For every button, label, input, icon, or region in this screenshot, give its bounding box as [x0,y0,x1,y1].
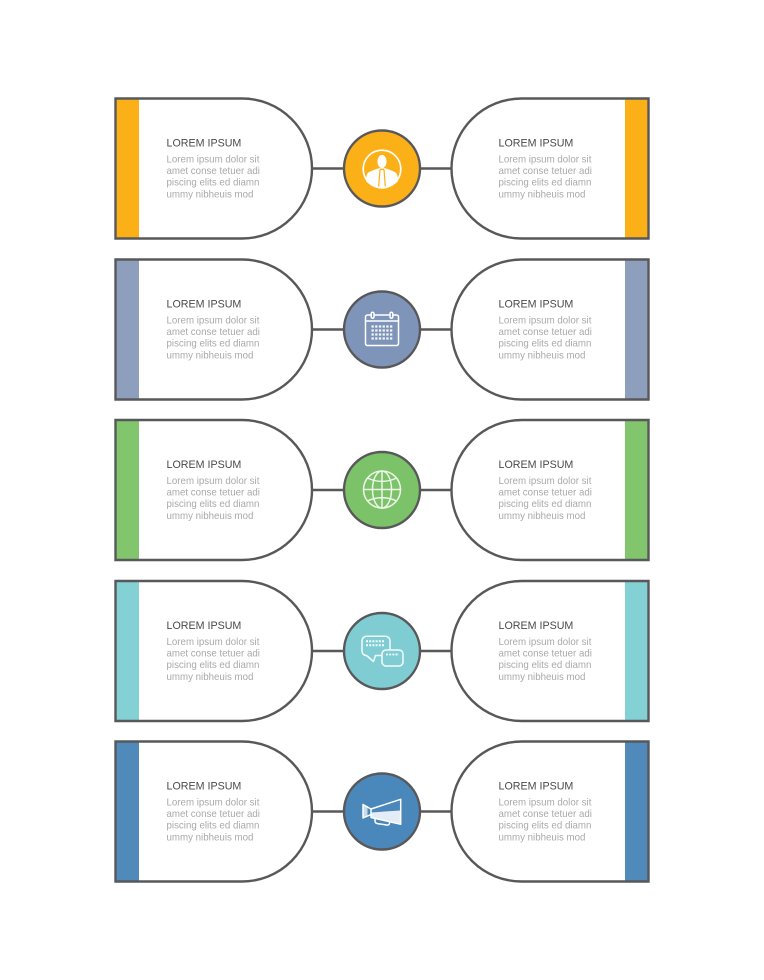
left text 4: LOREM IPSUM [166,620,241,632]
left panel 1 [116,98,312,238]
circle 4 [344,613,420,689]
left text 3: ummy nibheuis mod [166,511,253,522]
icon: megaphone [363,799,401,825]
row 4: teal [116,581,648,721]
right text 4: ummy nibheuis mod [498,672,585,683]
icon: calendar [366,312,398,346]
left text 3: LOREM IPSUM [166,459,241,471]
left text 5: Lorem ipsum dolor sit [166,797,260,808]
right text 2: Lorem ipsum dolor sit [498,315,592,326]
right text 3 [498,459,592,522]
right text 3: amet conse tetuer adi [498,488,592,498]
left text 4: Lorem ipsum dolor sit [166,637,260,648]
right text 4: Lorem ipsum dolor sit [498,637,592,648]
right text 3: piscing elits ed diamn [498,499,591,510]
right text 4 [498,620,592,683]
left text 1 [166,138,260,200]
right text 5: amet conse tetuer adi [498,809,592,820]
left text 3: amet conse tetuer adi [166,488,260,498]
left text 4: piscing elits ed diamn [166,660,259,671]
left text 1: amet conse tetuer adi [166,166,260,177]
right text 1: amet conse tetuer adi [498,166,592,177]
left text 2: amet conse tetuer adi [166,327,260,338]
right text 2: piscing elits ed diamn [498,339,591,350]
left text 3 [166,459,260,522]
left text 4: amet conse tetuer adi [166,648,260,660]
right text 2: amet conse tetuer adi [498,327,592,338]
right panel 4 [452,581,648,721]
connector 1 [312,167,452,170]
right text 4: amet conse tetuer adi [498,648,592,660]
left panel 3 [116,420,312,560]
row 1: orange [116,98,648,238]
right text 5: Lorem ipsum dolor sit [498,797,592,808]
right panel 5 [452,742,648,882]
left text 5: LOREM IPSUM [166,780,241,792]
right text 5: LOREM IPSUM [498,780,573,792]
circle 1 [344,130,420,206]
connector 2 [312,328,452,331]
left text 1: piscing elits ed diamn [166,178,259,189]
right text 1: Lorem ipsum dolor sit [498,154,592,165]
left text 5: piscing elits ed diamn [166,821,259,832]
left text 2: Lorem ipsum dolor sit [166,315,260,326]
left text 1: LOREM IPSUM [166,138,241,150]
left text 3: Lorem ipsum dolor sit [166,476,260,487]
row 3: green [116,420,648,560]
left text 5: amet conse tetuer adi [166,809,260,820]
left text 5: ummy nibheuis mod [166,832,253,843]
row 2: slate blue [116,260,648,400]
right panel 2 [452,260,648,400]
right text 2: ummy nibheuis mod [498,350,585,361]
left text 1: ummy nibheuis mod [166,189,253,200]
left panel 5 [116,742,312,882]
left text 2: piscing elits ed diamn [166,339,259,350]
connector 3 [312,489,452,491]
circle 3 [344,452,420,528]
connector 4 [312,650,452,652]
right panel 3 [452,420,648,560]
right text 4: piscing elits ed diamn [498,660,591,671]
left text 2 [166,298,260,361]
right text 3: ummy nibheuis mod [498,511,585,522]
left text 5 [166,780,260,843]
right panel 1 [452,98,648,238]
left panel 2 [116,260,312,400]
right text 1: ummy nibheuis mod [498,189,585,200]
right text 1 [498,138,592,200]
right text 2 [498,298,592,361]
connector 5 [312,810,452,813]
right text 3: Lorem ipsum dolor sit [498,476,592,487]
row 5: blue [116,742,648,882]
left text 4: ummy nibheuis mod [166,672,253,683]
right text 1: LOREM IPSUM [498,138,573,150]
left text 2: ummy nibheuis mod [166,350,253,361]
left panel 4 [116,581,312,721]
right text 1: piscing elits ed diamn [498,178,591,189]
icon: globe [364,471,400,508]
right text 4: LOREM IPSUM [498,620,573,632]
left text 1: Lorem ipsum dolor sit [166,154,260,165]
left text 3: piscing elits ed diamn [166,499,259,510]
right text 2: LOREM IPSUM [498,298,573,310]
right text 5 [498,780,592,843]
icon: chat bubbles [362,636,403,666]
left text 4 [166,620,260,683]
circle 5 [344,774,420,850]
circle 2 [344,292,420,368]
right text 3: LOREM IPSUM [498,459,573,471]
icon: person in tie [363,150,401,188]
right text 5: piscing elits ed diamn [498,821,591,832]
right text 5: ummy nibheuis mod [498,832,585,843]
left text 2: LOREM IPSUM [166,298,241,310]
